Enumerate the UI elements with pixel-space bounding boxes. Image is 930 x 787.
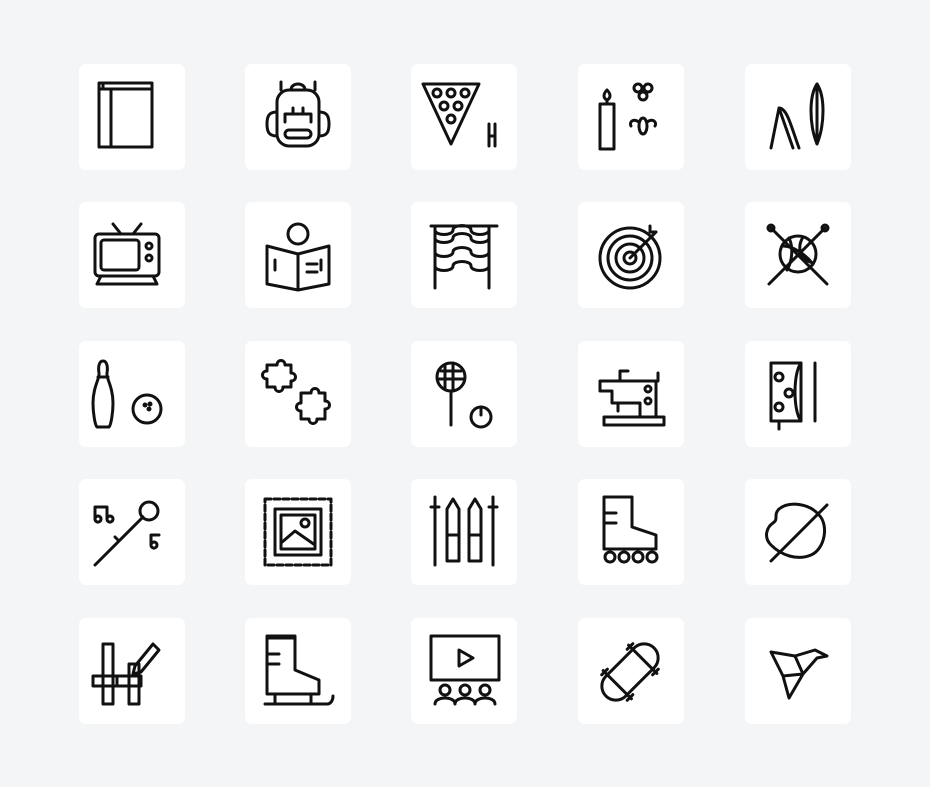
icon: puzzle pieces: [262, 360, 330, 424]
card: origami: [745, 618, 851, 724]
card: reading: [245, 202, 351, 308]
icon: backpack: [267, 82, 329, 146]
icon: roller skate: [604, 497, 657, 562]
card: ice skate: [245, 618, 351, 724]
card: book: [79, 64, 185, 170]
card: bowling: [79, 341, 185, 447]
card: target: [578, 202, 684, 308]
icon: surfboard and wave: [771, 84, 823, 148]
icon: target: [600, 226, 660, 288]
card: tv: [79, 202, 185, 308]
card: skateboard: [578, 618, 684, 724]
icon: microphone and notes: [95, 502, 159, 565]
icon: billiard rack: [423, 84, 495, 146]
icon: postage stamp: [265, 499, 331, 565]
card: skis: [411, 479, 517, 585]
card: backpack: [245, 64, 351, 170]
card: stamp: [245, 479, 351, 585]
card: yarn: [745, 202, 851, 308]
card: surf: [745, 64, 851, 170]
card: sewing machine: [578, 341, 684, 447]
icon: cinema screen: [431, 636, 499, 704]
icon: bowling pin and ball: [93, 361, 161, 427]
card: rolling pin: [745, 479, 851, 585]
icon: skis: [431, 497, 497, 565]
card: puzzle: [245, 341, 351, 447]
icon: yarn ball with needles: [768, 225, 828, 284]
card: cinema: [411, 618, 517, 724]
icon: ice skate: [265, 636, 333, 704]
card: karaoke: [79, 479, 185, 585]
card: tennis: [411, 341, 517, 447]
icon: tv: [95, 224, 159, 284]
card: crossword: [79, 618, 185, 724]
icon: person reading: [267, 224, 329, 290]
card: billiards: [411, 64, 517, 170]
card: candle: [578, 64, 684, 170]
icon: crossword and pencil: [93, 644, 159, 704]
icon: candle and bee: [600, 84, 656, 149]
icon: origami crane: [771, 650, 827, 698]
icon: knitting needle scarf: [431, 226, 497, 288]
icon: sewing machine: [600, 371, 664, 425]
icon: skateboard: [592, 634, 668, 710]
card: roller skate: [578, 479, 684, 585]
icon: cheese: [771, 363, 815, 429]
icon: dough and rolling pin: [767, 504, 827, 561]
icon: book: [99, 83, 152, 147]
icon: tennis racket and ball: [437, 363, 491, 427]
card: knitting scarf: [411, 202, 517, 308]
card: cheese: [745, 341, 851, 447]
